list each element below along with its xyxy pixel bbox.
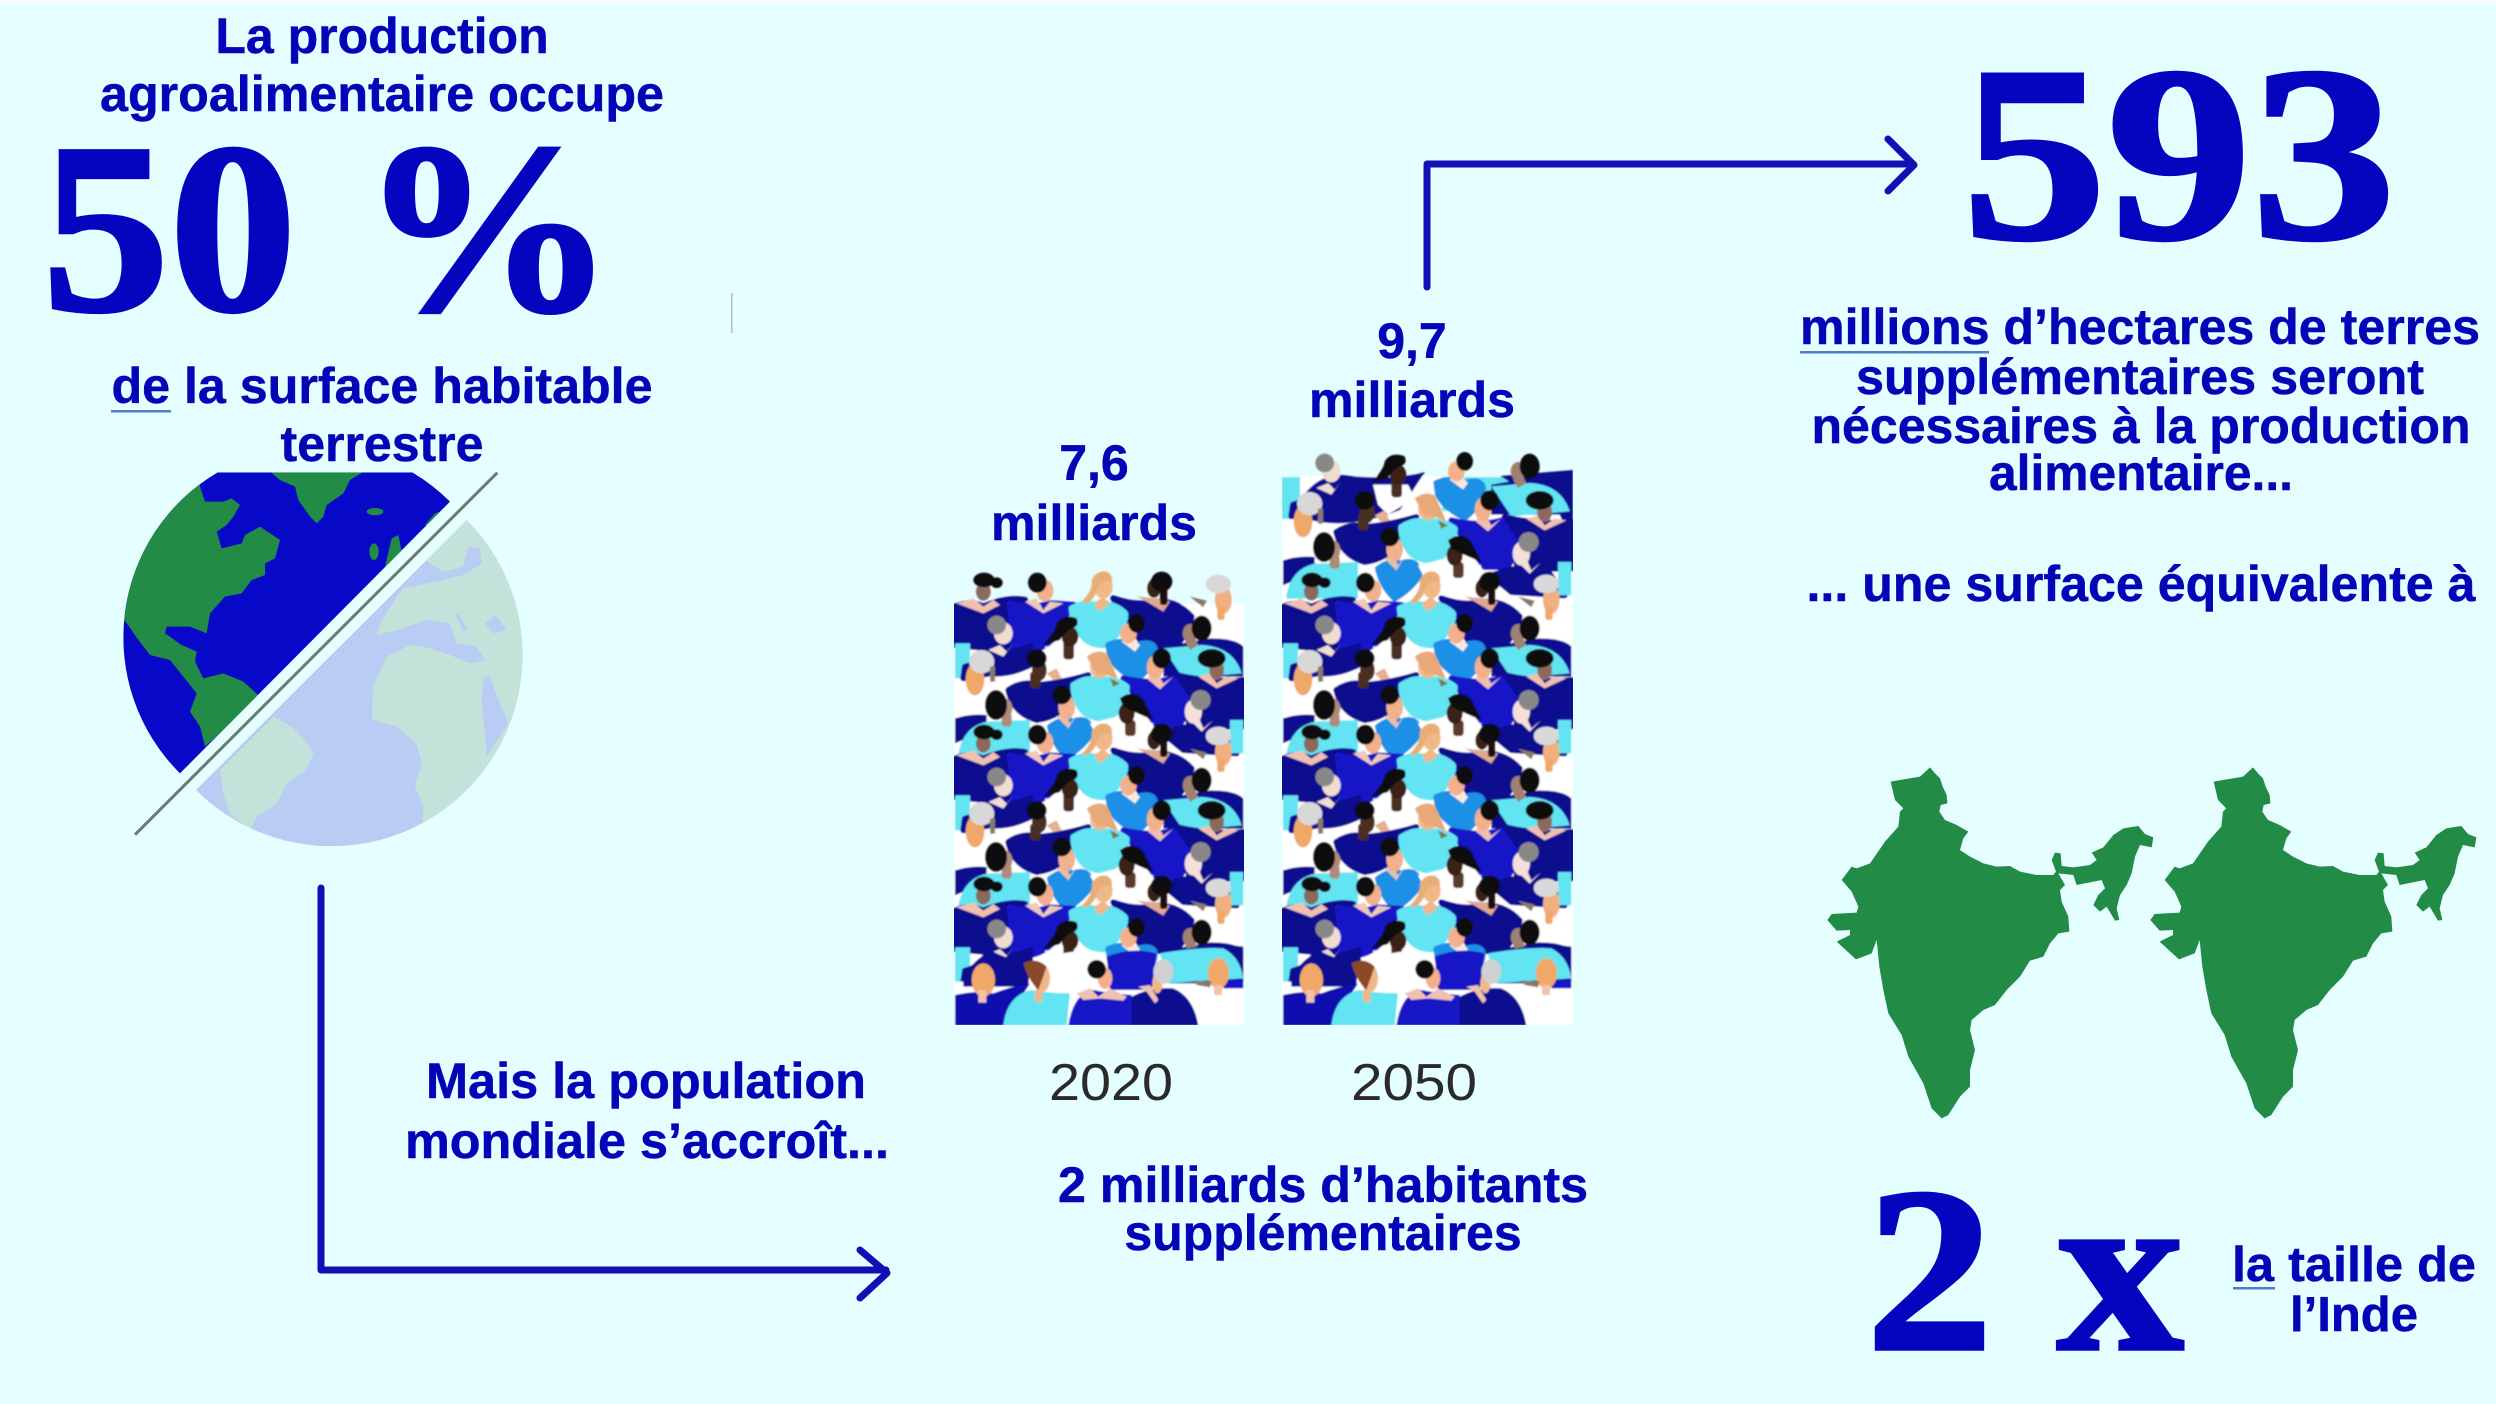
globe lower half, faded colours (196, 520, 522, 846)
globe upper half, saturated colours (123, 472, 450, 774)
big number: 50 %: 50 % (42, 93, 615, 363)
crowd column 2020 (954, 571, 1244, 1025)
year label 2050: 2050 (1351, 1054, 1477, 1112)
text: millions d'hectares de terres supplémentaires: nécessaires à la production (1812, 398, 2470, 454)
text: la taille de l'Inde: la taille de (2232, 1238, 2476, 1292)
text: Mais la population mondiale s'accroît: mondiale s’accroît... (405, 1113, 889, 1169)
icon: globe split in two halves (123, 472, 522, 846)
icon: two India maps (1827, 767, 2476, 1118)
text: millions d'hectares de terres supplémentaires (1800, 299, 2480, 501)
text: millions d'hectares de terres supplémentaires: supplémentaires seront (1856, 349, 2424, 405)
text: Mais la population mondiale s'accroît (405, 1053, 889, 1169)
globe diagonal divider (135, 473, 497, 835)
heading: La production agroalimentaire occupe: agroalimentaire occupe (100, 66, 664, 122)
text: millions d'hectares de terres supplémentaires: alimentaire... (1989, 445, 2293, 501)
year label 2020: 2020 (1049, 1054, 1173, 1112)
heading: La production agroalimentaire occupe (100, 8, 664, 122)
text: la taille de l'Inde (2232, 1238, 2476, 1342)
label: 7,6 milliards (991, 435, 1197, 551)
small vertical tick (731, 293, 732, 333)
label: 7,6 milliards: milliards (991, 495, 1197, 551)
heading: La production agroalimentaire occupe: La production (215, 8, 549, 64)
crowd column 2050 (1282, 452, 1573, 1025)
label: 7,6 milliards: 7,6 (1059, 435, 1129, 491)
text: millions d'hectares de terres supplémentaires: millions d’hectares de terres (1800, 299, 2480, 355)
big number: 2 x: 2 x (1866, 1140, 2184, 1400)
text: la taille de l'Inde: l’Inde (2290, 1288, 2418, 1342)
arrow: from globe to population text (321, 888, 887, 1298)
text: de la surface habitable terrestre: terrestre (281, 416, 483, 472)
text: 2 milliards d'habitants supplémentaires: 2 milliards d’habitants (1058, 1157, 1588, 1213)
text: de la surface habitable terrestre (111, 358, 652, 472)
text: 2 milliards d'habitants supplémentaires: supplémentaires (1124, 1205, 1522, 1261)
India map 2 (2150, 767, 2476, 1118)
text: Mais la population mondiale s'accroît: Mais la population (426, 1053, 866, 1109)
arrow: from 2050 column to 593 (1427, 139, 1914, 287)
text: de la surface habitable terrestre: de la surface habitable (112, 358, 652, 414)
label: 9,7 milliards (1309, 313, 1515, 428)
label: 9,7 milliards: 9,7 (1377, 313, 1447, 369)
text: une surface équivalente à: ... une surface équivalente à (1806, 556, 2476, 612)
label: 9,7 milliards: milliards (1309, 372, 1515, 428)
big number: 593: 593 (1962, 16, 2396, 293)
India map 1 (1827, 767, 2153, 1118)
text: 2 milliards d'habitants supplémentaires (1058, 1157, 1588, 1261)
